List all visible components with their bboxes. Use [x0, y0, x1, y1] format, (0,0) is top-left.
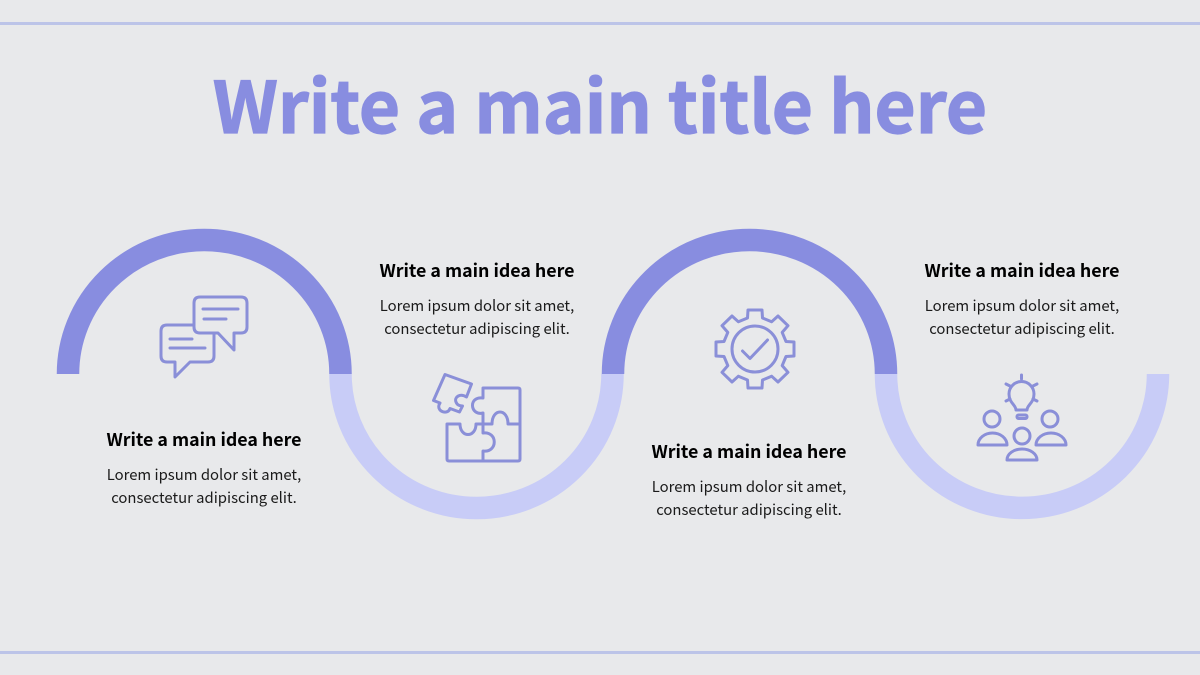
icon: speech bubbles — [161, 297, 247, 377]
top border line — [0, 22, 1200, 25]
body 4 — [925, 295, 1119, 339]
text block 1 — [106, 426, 302, 508]
bottom border line — [0, 651, 1200, 654]
body 1 — [107, 464, 301, 508]
heading 3: Write a main idea here — [651, 438, 847, 464]
text block 2 — [379, 257, 575, 339]
body 2 — [380, 295, 574, 339]
text block 3 — [651, 438, 847, 520]
body 3: consectetur adipiscing elit. — [656, 499, 842, 520]
title: Write a main title here — [213, 52, 987, 154]
body 2: consectetur adipiscing elit. — [384, 318, 570, 339]
arc 4 — [886, 374, 1158, 508]
body 1: Lorem ipsum dolor sit amet, — [107, 464, 301, 485]
heading 1: Write a main idea here — [106, 426, 302, 452]
arc 3 — [613, 240, 886, 374]
icon: people with idea — [978, 375, 1066, 460]
body 4: consectetur adipiscing elit. — [929, 318, 1115, 339]
heading 4: Write a main idea here — [924, 257, 1120, 283]
icon: gear with check — [716, 310, 794, 388]
body 4: Lorem ipsum dolor sit amet, — [925, 295, 1119, 316]
arc 2 — [340, 374, 612, 508]
arc 1 — [68, 240, 340, 374]
text block 4 — [924, 257, 1120, 339]
heading 2: Write a main idea here — [379, 257, 575, 283]
icon: puzzle — [434, 374, 520, 461]
body 3: Lorem ipsum dolor sit amet, — [652, 476, 846, 497]
body 3 — [652, 476, 846, 520]
body 2: Lorem ipsum dolor sit amet, — [380, 295, 574, 316]
body 1: consectetur adipiscing elit. — [111, 487, 297, 508]
